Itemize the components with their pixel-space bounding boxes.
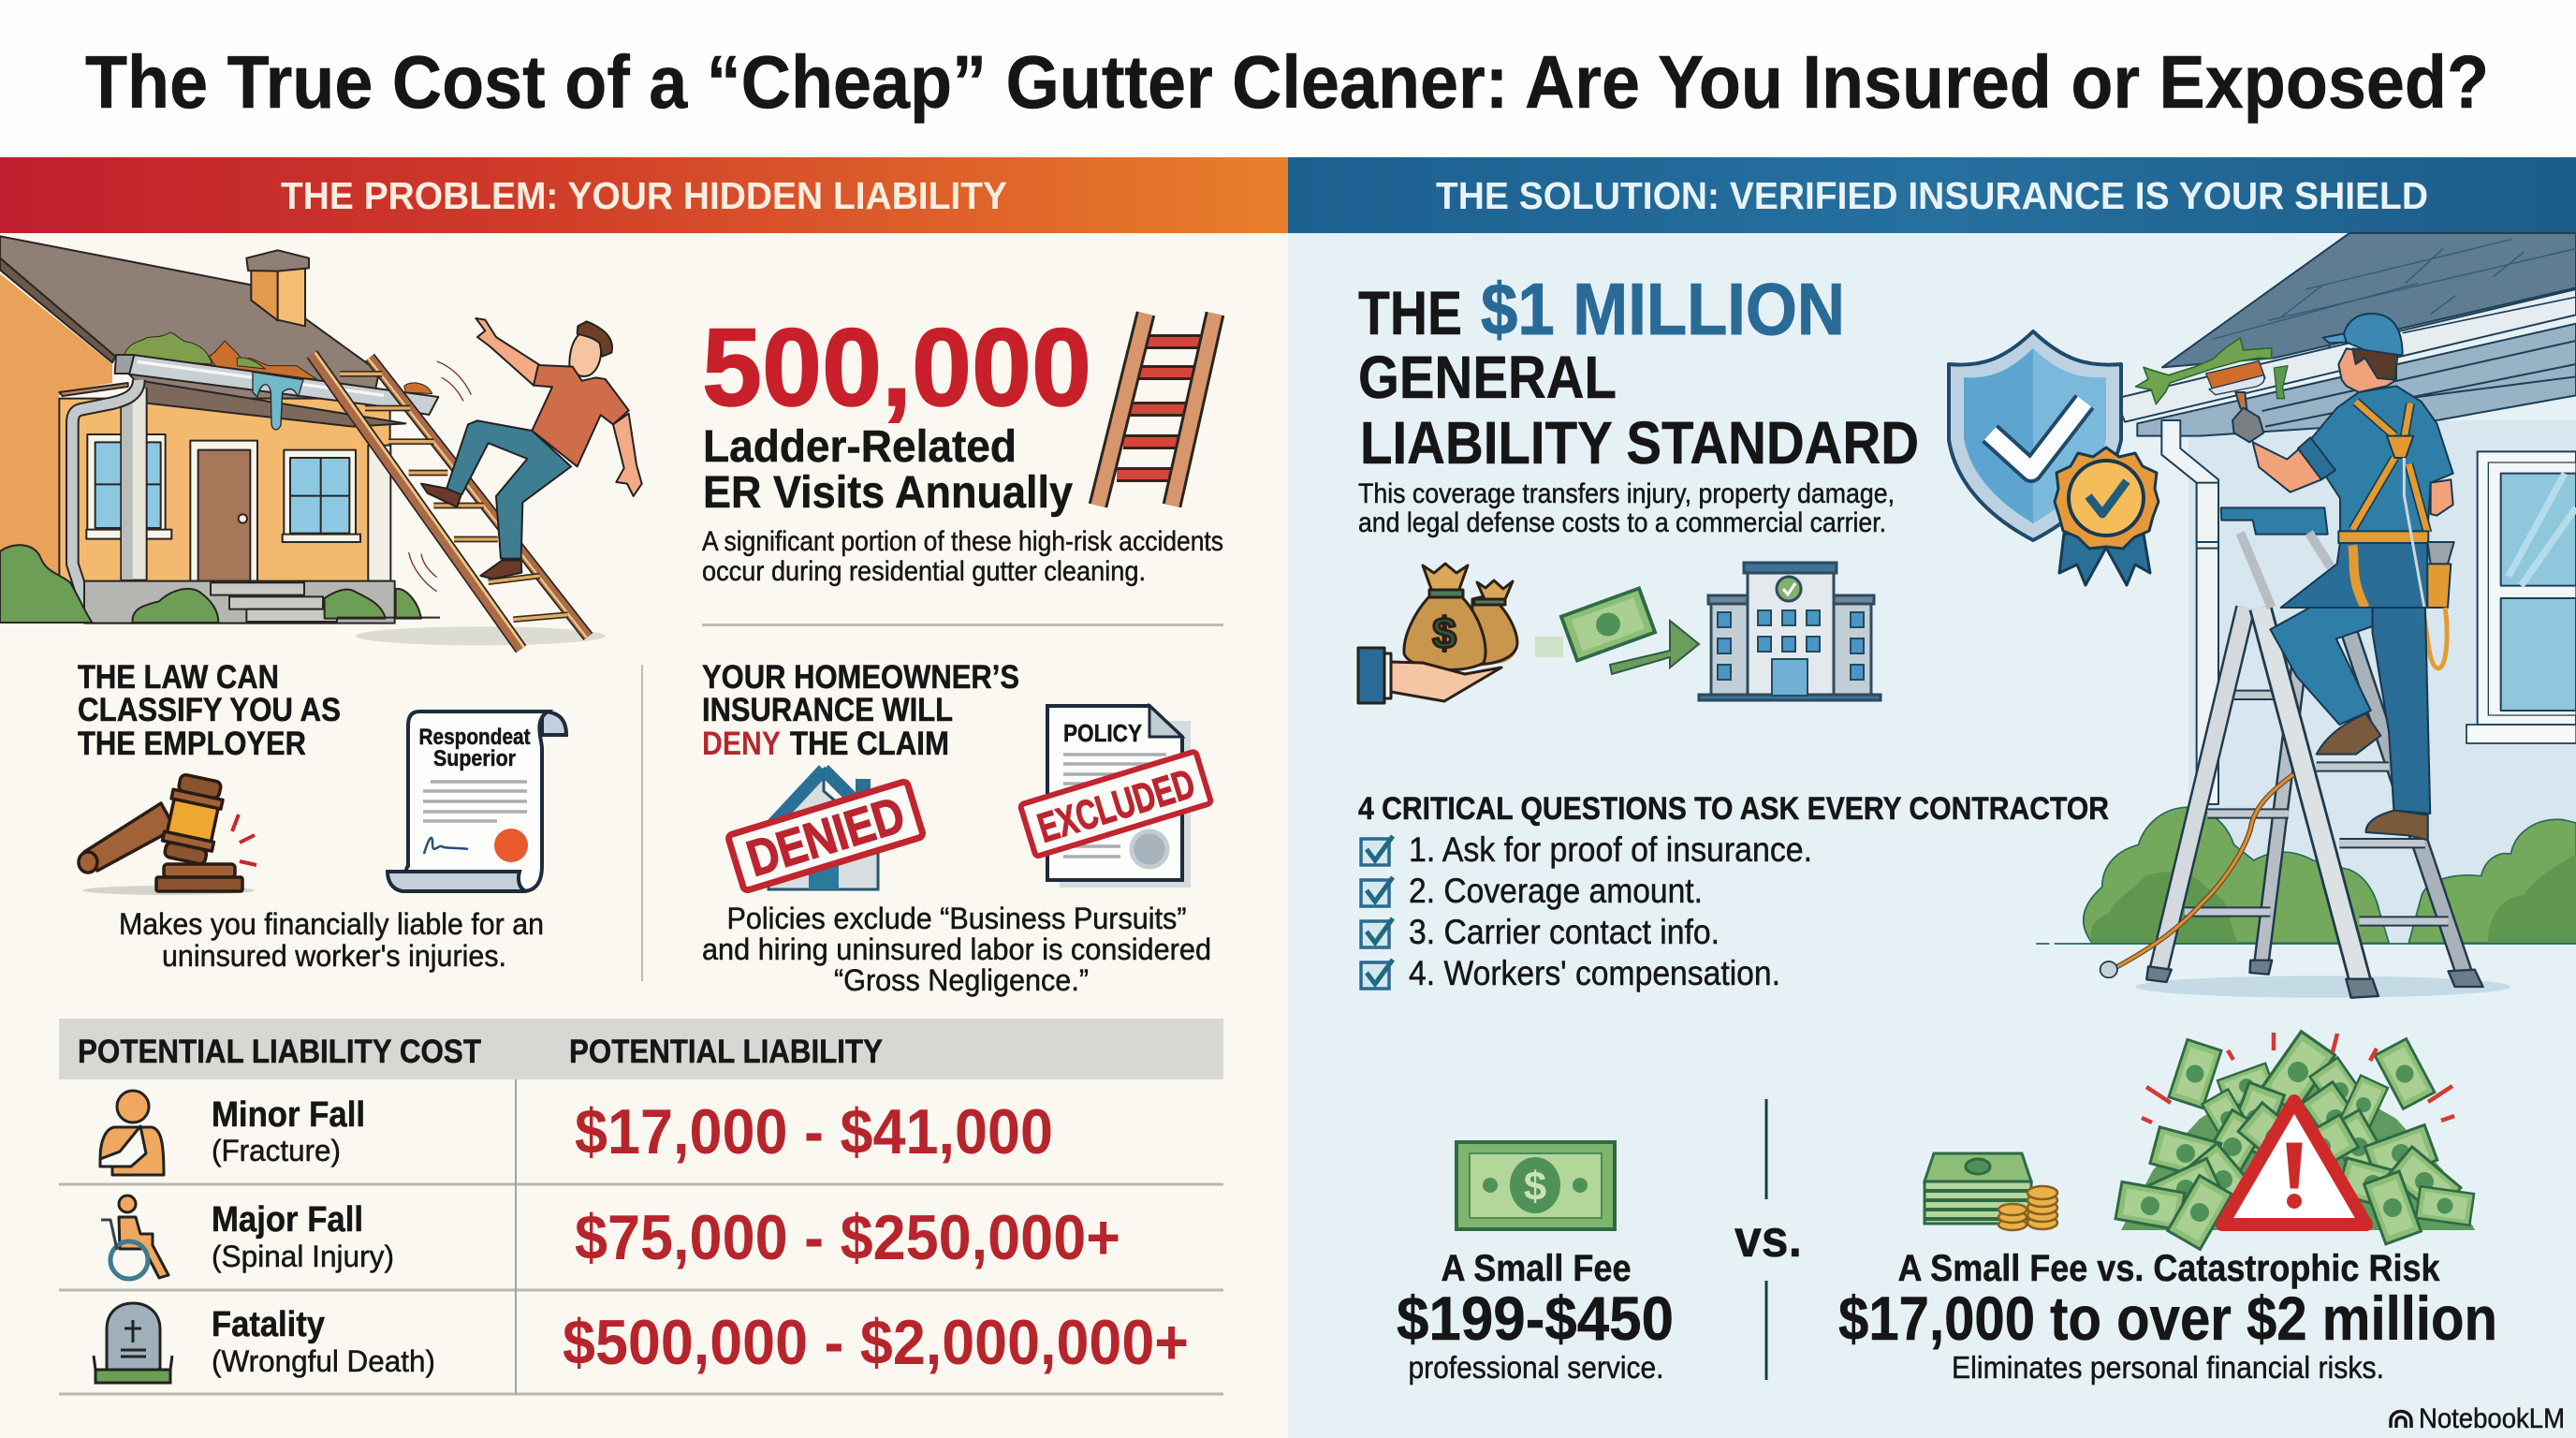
page background xyxy=(0,0,2576,157)
stat label: Ladder-Related xyxy=(703,422,1017,472)
text: insurance exclusion note: Policies exclude “Business Pursuits” xyxy=(726,902,1187,935)
text: law liability note xyxy=(119,907,544,973)
stat description: occur during residential gutter cleaning. xyxy=(702,556,1146,587)
header: the solution xyxy=(1288,157,2576,233)
question 2: 2. Coverage amount. xyxy=(1409,872,1703,910)
icon: dollar bill xyxy=(1456,1142,1615,1229)
header: the problem xyxy=(0,157,1288,233)
row: fatality: (Wrongful Death) xyxy=(212,1344,435,1378)
heading: $1 million standard xyxy=(1358,268,1919,477)
icon: shield with check xyxy=(1949,331,2121,540)
row: major fall: $75,000 - $250,000+ xyxy=(575,1202,1120,1273)
stat description: A significant portion of these high-risk accidents xyxy=(702,526,1223,557)
row: fatality xyxy=(94,1303,1189,1383)
icon: respondeat superior scroll: Superior xyxy=(433,746,516,771)
question 1: 1. Ask for proof of insurance. xyxy=(1409,830,1812,869)
icon: certified ribbon badge xyxy=(2055,448,2159,585)
icon: denied house: DENIED xyxy=(740,786,911,888)
comparison: catastrophic risk xyxy=(1838,1032,2497,1385)
vs divider xyxy=(1734,1099,1802,1380)
icon: excluded policy: EXCLUDED xyxy=(1032,761,1200,852)
heading: law can classify you: THE EMPLOYER xyxy=(78,726,306,762)
row: minor fall: $17,000 - $41,000 xyxy=(575,1096,1053,1167)
heading: $1 million standard: $1 MILLION xyxy=(1481,268,1845,350)
text: insurance exclusion note: and hiring uninsured labor is considered xyxy=(702,932,1211,966)
comparison: small fee: $199-$450 xyxy=(1397,1284,1674,1353)
text: coverage description xyxy=(1358,478,1895,538)
table header xyxy=(59,1019,1223,1079)
illustration: insured worker on ladder at house xyxy=(2036,233,2576,998)
icon: tombstone xyxy=(94,1303,172,1383)
text: coverage description: This coverage transfers injury, property damage, xyxy=(1358,478,1895,509)
heading: $1 million standard: GENERAL xyxy=(1358,344,1617,411)
icon: hand with money bags xyxy=(1358,564,1517,703)
icon: gavel xyxy=(79,773,256,895)
question 3: 3. Carrier contact info. xyxy=(1409,913,1720,951)
panel: the problem xyxy=(0,157,1288,1438)
row: fatality: $500,000 - $2,000,000+ xyxy=(563,1307,1189,1378)
comparison: small fee: professional service. xyxy=(1408,1350,1664,1385)
row: minor fall xyxy=(100,1091,1053,1175)
heading: homeowner's insurance: INSURANCE WILL xyxy=(702,692,953,728)
icon: respondeat superior scroll: Respondeat xyxy=(419,725,531,750)
stat description xyxy=(702,526,1223,587)
stat: 500,000: 500,000 xyxy=(702,306,1091,430)
heading: homeowner's insurance: DENY xyxy=(702,726,781,762)
table header: POTENTIAL LIABILITY COST xyxy=(78,1034,481,1070)
row: minor fall: Minor Fall xyxy=(212,1095,365,1135)
heading: $1 million standard: LIABILITY STANDARD xyxy=(1360,409,1919,477)
comparison: small fee: A Small Fee xyxy=(1442,1248,1631,1289)
illustration: house with clogged gutter xyxy=(0,236,440,624)
checklist: critical questions xyxy=(1358,791,2109,992)
text: insurance exclusion note xyxy=(702,902,1211,997)
text: coverage description: and legal defense costs to a commercial carrier. xyxy=(1358,507,1886,538)
icon: respondeat superior scroll xyxy=(388,712,566,891)
text: law liability note: uninsured worker's injuries. xyxy=(162,939,506,973)
icon: wheelchair xyxy=(101,1196,168,1279)
panel: the solution xyxy=(1288,157,2576,1438)
stat label xyxy=(703,422,1073,518)
illustration: worker falling from ladder xyxy=(312,318,642,649)
table: potential liability cost xyxy=(59,1019,1223,1394)
heading: homeowner's insurance xyxy=(702,659,1019,762)
ground and bushes xyxy=(2036,725,2576,998)
heading: law can classify you xyxy=(78,659,341,762)
comparison: catastrophic risk: $17,000 to over $2 million xyxy=(1838,1284,2497,1353)
table header: POTENTIAL LIABILITY xyxy=(569,1034,883,1070)
icon: hand with money bags: $ xyxy=(1432,609,1456,657)
row: minor fall: (Fracture) xyxy=(212,1134,341,1167)
icon: payment arrow to carrier xyxy=(1535,588,1699,674)
logo: NotebookLM: NotebookLM xyxy=(2419,1403,2565,1434)
icon: excluded policy xyxy=(1020,706,1211,888)
heading: homeowner's insurance: YOUR HOMEOWNER’S xyxy=(702,659,1019,696)
row: major fall: Major Fall xyxy=(212,1200,363,1240)
text: insurance exclusion note: “Gross Negligence.” xyxy=(834,963,1089,997)
comparison: catastrophic risk: A Small Fee vs. Catastrophic Risk xyxy=(1898,1248,2440,1289)
row: major fall xyxy=(101,1196,1120,1279)
row: major fall: (Spinal Injury) xyxy=(212,1240,394,1273)
row: fatality: Fatality xyxy=(212,1305,325,1344)
comparison: catastrophic risk: Eliminates personal financial risks. xyxy=(1952,1350,2384,1385)
worker in harness xyxy=(2136,314,2454,608)
vs divider: vs. xyxy=(1734,1209,1802,1268)
text: law liability note: Makes you financially liable for an xyxy=(119,907,544,941)
comparison: small fee xyxy=(1397,1142,1674,1385)
heading: homeowner's insurance: THE CLAIM xyxy=(790,726,949,762)
heading: law can classify you: THE LAW CAN xyxy=(78,659,279,696)
header: the problem: THE PROBLEM: YOUR HIDDEN LIABILITY xyxy=(281,174,1007,217)
heading: law can classify you: CLASSIFY YOU AS xyxy=(78,692,341,728)
stat label: ER Visits Annually xyxy=(703,468,1073,518)
icon: dollar bill: $ xyxy=(1524,1164,1546,1210)
heading: $1 million standard: THE xyxy=(1358,278,1462,347)
house wall and roof xyxy=(2115,233,2576,943)
header: the solution: THE SOLUTION: VERIFIED INSURANCE IS YOUR SHIELD xyxy=(1436,174,2428,217)
icon: excluded policy: POLICY xyxy=(1063,719,1142,747)
step ladder xyxy=(2146,608,2483,998)
question 4: 4. Workers' compensation. xyxy=(1409,954,1780,992)
icon: red ladder xyxy=(1098,314,1215,506)
checklist: critical questions: 4 CRITICAL QUESTIONS TO ASK EVERY CONTRACTOR xyxy=(1358,791,2109,827)
worker legs and safety rope xyxy=(2100,608,2447,977)
icon: injured person xyxy=(100,1091,164,1175)
icon: insurance carrier building xyxy=(1699,563,1881,700)
icon: bill stack and coins xyxy=(1925,1153,2057,1230)
icon: money pile with warning xyxy=(2115,1032,2475,1249)
